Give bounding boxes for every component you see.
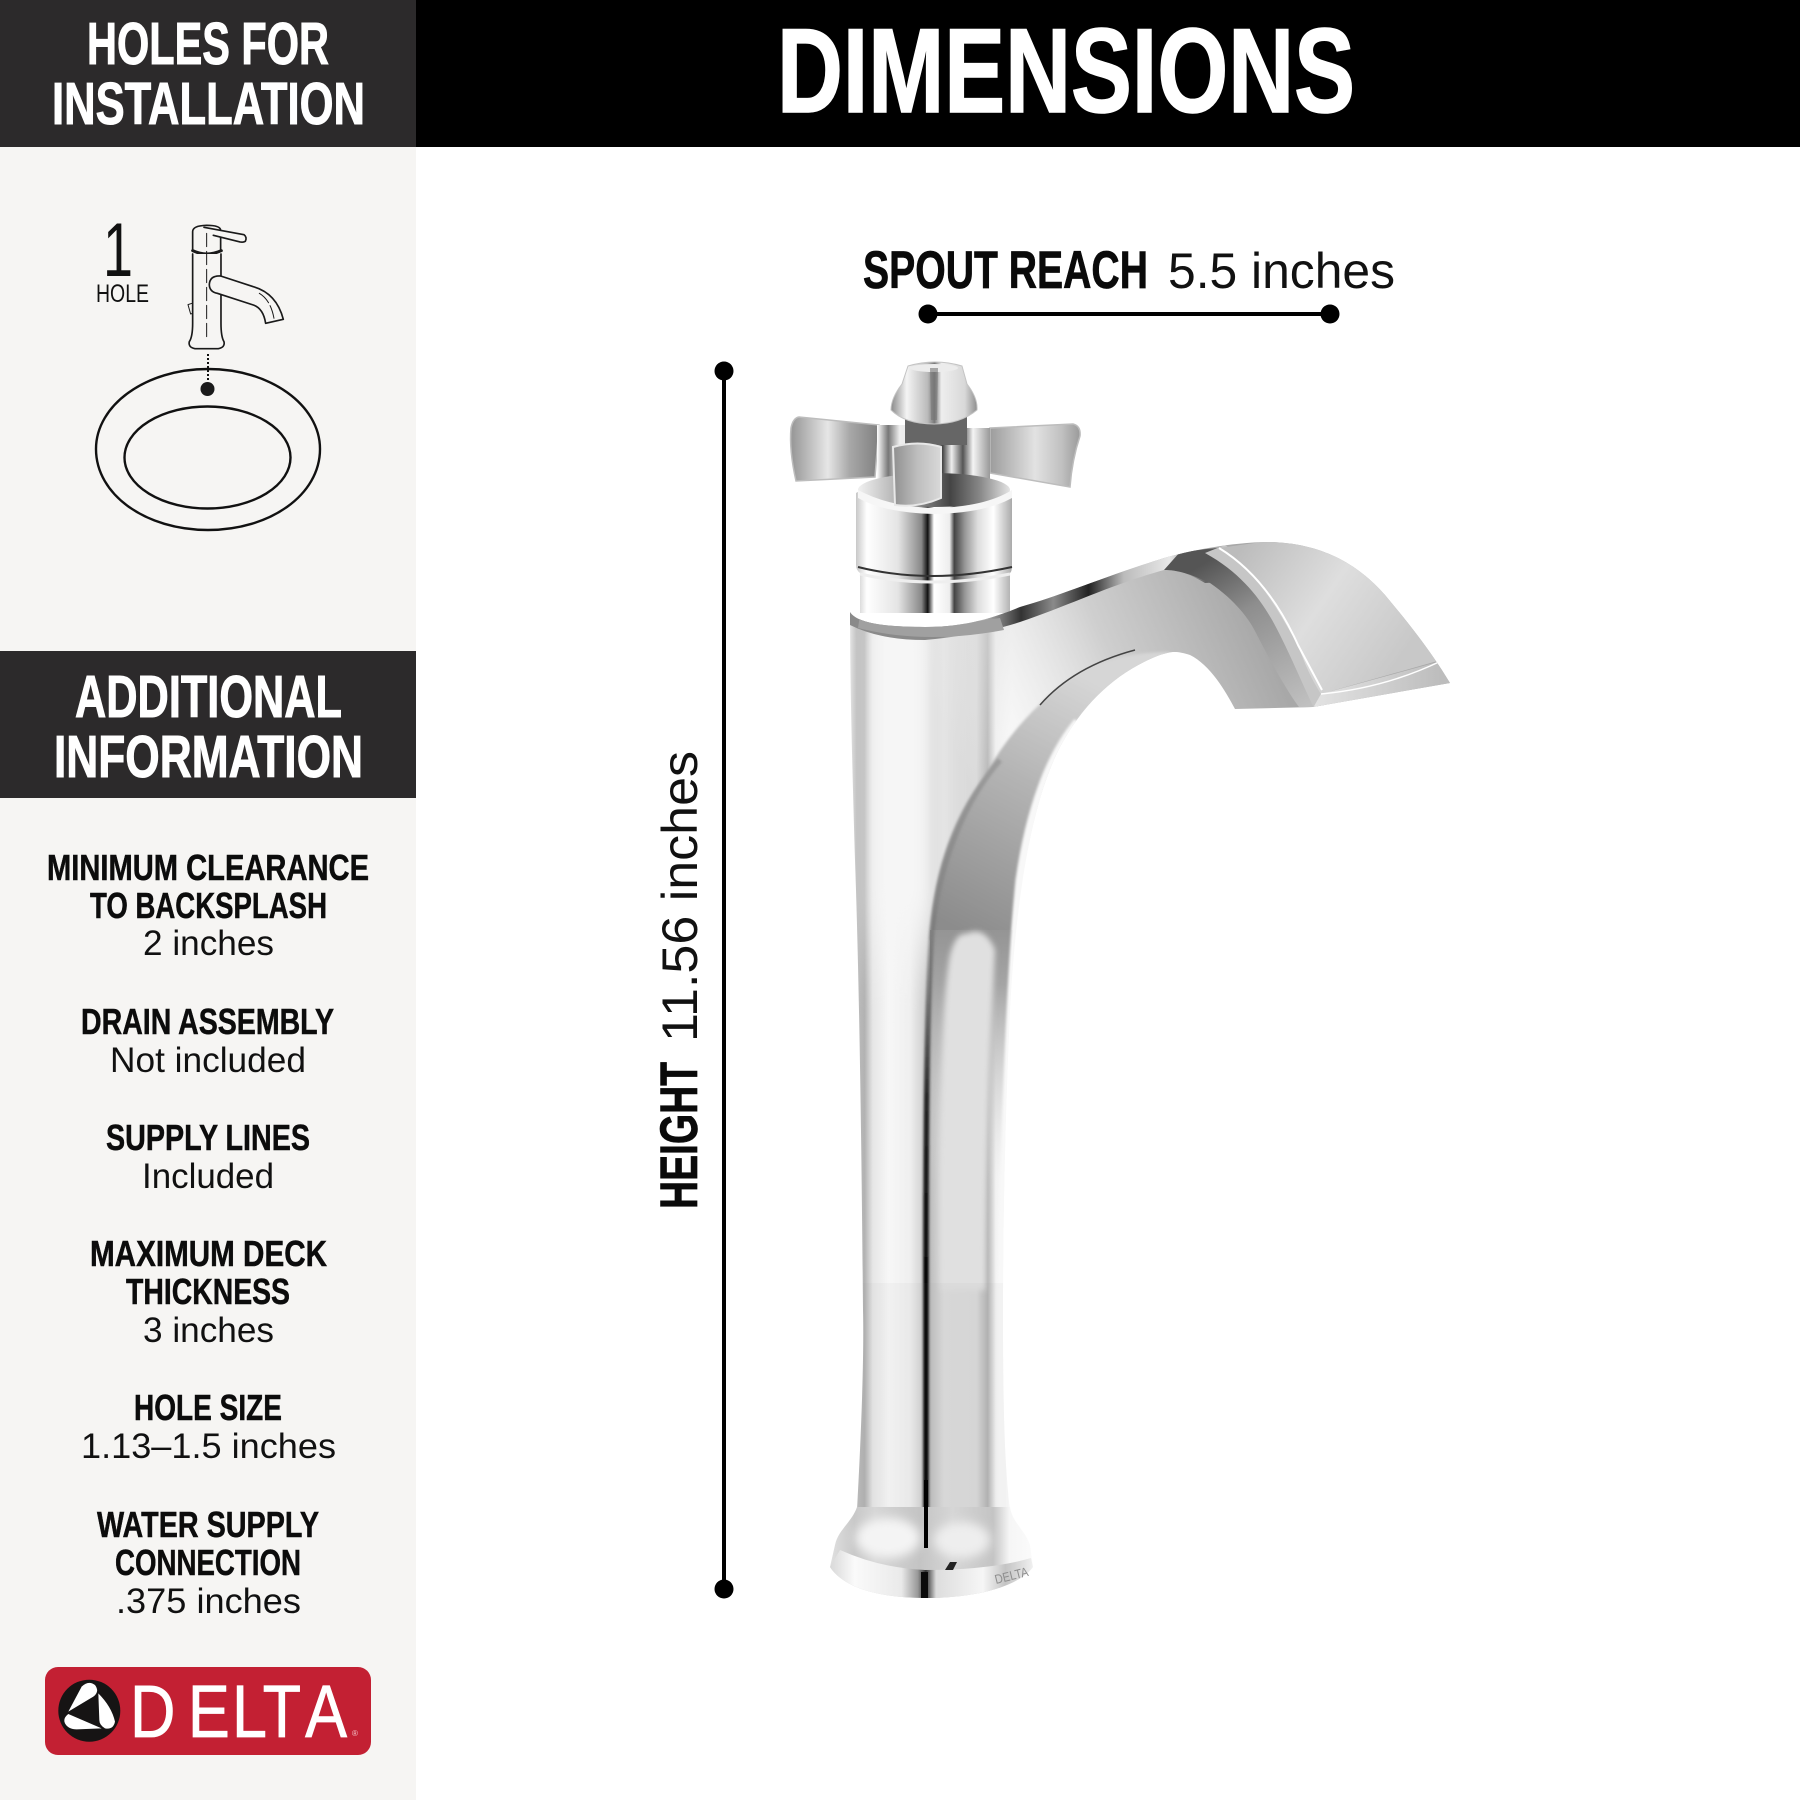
heading: holes for installation: HOLES FOR <box>87 11 329 77</box>
title: dimensions <box>416 0 1800 147</box>
dimension arrow: spout reach <box>918 304 1340 324</box>
one hole label <box>96 208 149 308</box>
info: water supply connection <box>97 1504 319 1621</box>
faucet illustration <box>791 362 1470 1598</box>
faucet body and spout <box>840 530 1470 1545</box>
info: water supply connection: .375 inches <box>116 1582 301 1621</box>
one hole label: 1 <box>103 208 133 293</box>
dimension label: height: HEIGHT <box>650 1062 709 1209</box>
info: hole size: 1.13–1.5 inches <box>81 1427 336 1466</box>
info: supply lines: Included <box>142 1157 274 1196</box>
info: minimum clearance: MINIMUM CLEARANCE <box>47 847 369 888</box>
info: minimum clearance: TO BACKSPLASH <box>90 885 327 926</box>
faucet base <box>830 1480 1033 1598</box>
heading: additional information <box>0 651 416 798</box>
logo: delta: ® <box>352 1729 358 1738</box>
faucet handle wing left <box>791 417 879 481</box>
logo: delta <box>45 1667 371 1755</box>
icon: faucet line drawing <box>188 225 283 349</box>
faucet handle front <box>893 444 941 506</box>
faucet base brand mark: DELTA <box>993 1564 1030 1587</box>
faucet top button <box>891 362 977 445</box>
dimension label: spout reach: SPOUT REACH <box>863 241 1148 300</box>
faucet collar <box>856 473 1012 613</box>
info: hole size <box>81 1387 336 1466</box>
faucet handle hub <box>877 425 990 480</box>
logo: delta: DELTA <box>130 1670 347 1753</box>
title: dimensions: DIMENSIONS <box>777 4 1355 138</box>
info: supply lines <box>106 1117 310 1196</box>
heading: additional information: ADDITIONAL <box>75 664 342 730</box>
dimension arrow: height <box>714 362 734 1598</box>
info: maximum deck thickness <box>90 1233 327 1350</box>
info: minimum clearance: 2 inches <box>143 924 274 963</box>
one hole label: HOLE <box>96 280 149 308</box>
heading: holes for installation <box>0 0 416 147</box>
info: drain assembly: Not included <box>110 1041 306 1080</box>
faucet handle wing right <box>990 424 1080 487</box>
icon: sink basin with hole <box>96 354 320 530</box>
heading: additional information: INFORMATION <box>54 724 363 790</box>
info: drain assembly: DRAIN ASSEMBLY <box>81 1001 334 1042</box>
left sidebar panel <box>0 0 416 1800</box>
info: supply lines: SUPPLY LINES <box>106 1117 310 1158</box>
info: maximum deck thickness: THICKNESS <box>126 1271 290 1312</box>
dimension label: height: 11.56 inches <box>652 751 708 1042</box>
dimension label: spout reach: 5.5 inches <box>1168 243 1395 299</box>
info: minimum clearance <box>47 847 369 963</box>
info: maximum deck thickness: MAXIMUM DECK <box>90 1233 327 1274</box>
info: hole size: HOLE SIZE <box>134 1387 282 1428</box>
info: maximum deck thickness: 3 inches <box>143 1311 274 1350</box>
info: water supply connection: WATER SUPPLY <box>97 1504 319 1545</box>
info: water supply connection: CONNECTION <box>115 1542 301 1583</box>
heading: holes for installation: INSTALLATION <box>52 71 365 137</box>
dimension label: height <box>650 751 709 1209</box>
info: drain assembly <box>81 1001 334 1080</box>
